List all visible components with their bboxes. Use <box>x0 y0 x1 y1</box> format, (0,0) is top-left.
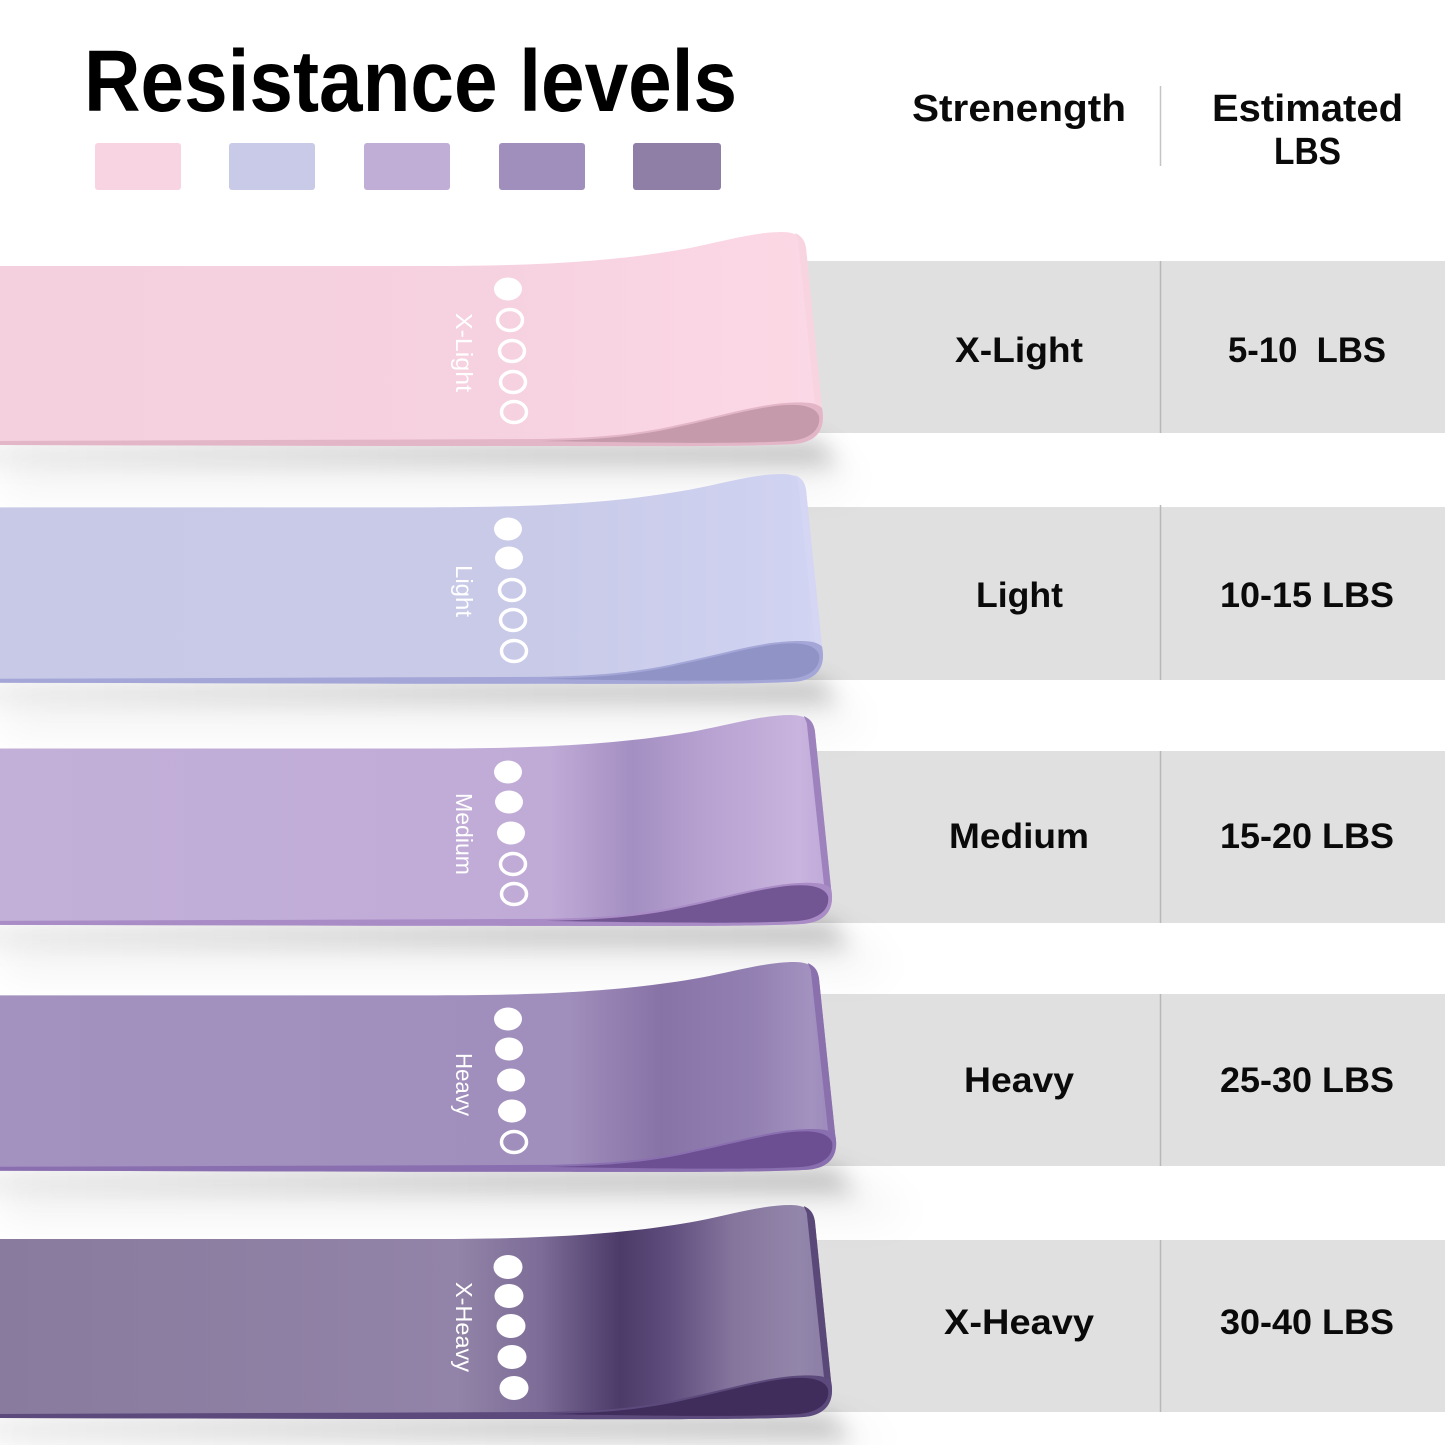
row: x-light values <box>955 331 1386 370</box>
colour swatch legend <box>95 143 721 190</box>
band: x-light <box>0 232 823 446</box>
row: x-light values: 5-10 LBS <box>1228 331 1386 370</box>
band: light <box>0 474 823 684</box>
title: Resistance levels <box>84 33 737 130</box>
band: x-light: X-Light <box>451 313 477 393</box>
row: medium values <box>949 817 1394 856</box>
band: medium <box>0 715 832 926</box>
column headers: Estimated <box>1212 88 1403 130</box>
column headers <box>912 86 1403 173</box>
row: light values <box>976 576 1394 615</box>
band: medium: Medium <box>451 793 477 875</box>
row: heavy values: Heavy <box>964 1061 1075 1100</box>
band: heavy <box>0 962 836 1172</box>
column headers: LBS <box>1274 131 1341 173</box>
band: x-heavy: X-Heavy <box>451 1282 477 1372</box>
row backgrounds <box>800 261 1445 1412</box>
row: x-light values: X-Light <box>955 331 1083 370</box>
row: light values: Light <box>976 576 1063 615</box>
row: medium values: Medium <box>949 817 1089 856</box>
row: light values: 10-15 LBS <box>1220 576 1394 615</box>
row: x-heavy values <box>944 1303 1394 1342</box>
band: x-heavy <box>0 1205 832 1419</box>
band shadows <box>0 440 920 1445</box>
row: heavy values <box>964 1061 1394 1100</box>
row: x-heavy values: 30-40 LBS <box>1220 1303 1394 1342</box>
band: light: Light <box>451 565 477 618</box>
row: medium values: 15-20 LBS <box>1220 817 1394 856</box>
column headers: Strenength <box>912 88 1126 130</box>
band: heavy: Heavy <box>451 1053 477 1116</box>
row: heavy values: 25-30 LBS <box>1220 1061 1394 1100</box>
row: x-heavy values: X-Heavy <box>944 1303 1095 1342</box>
